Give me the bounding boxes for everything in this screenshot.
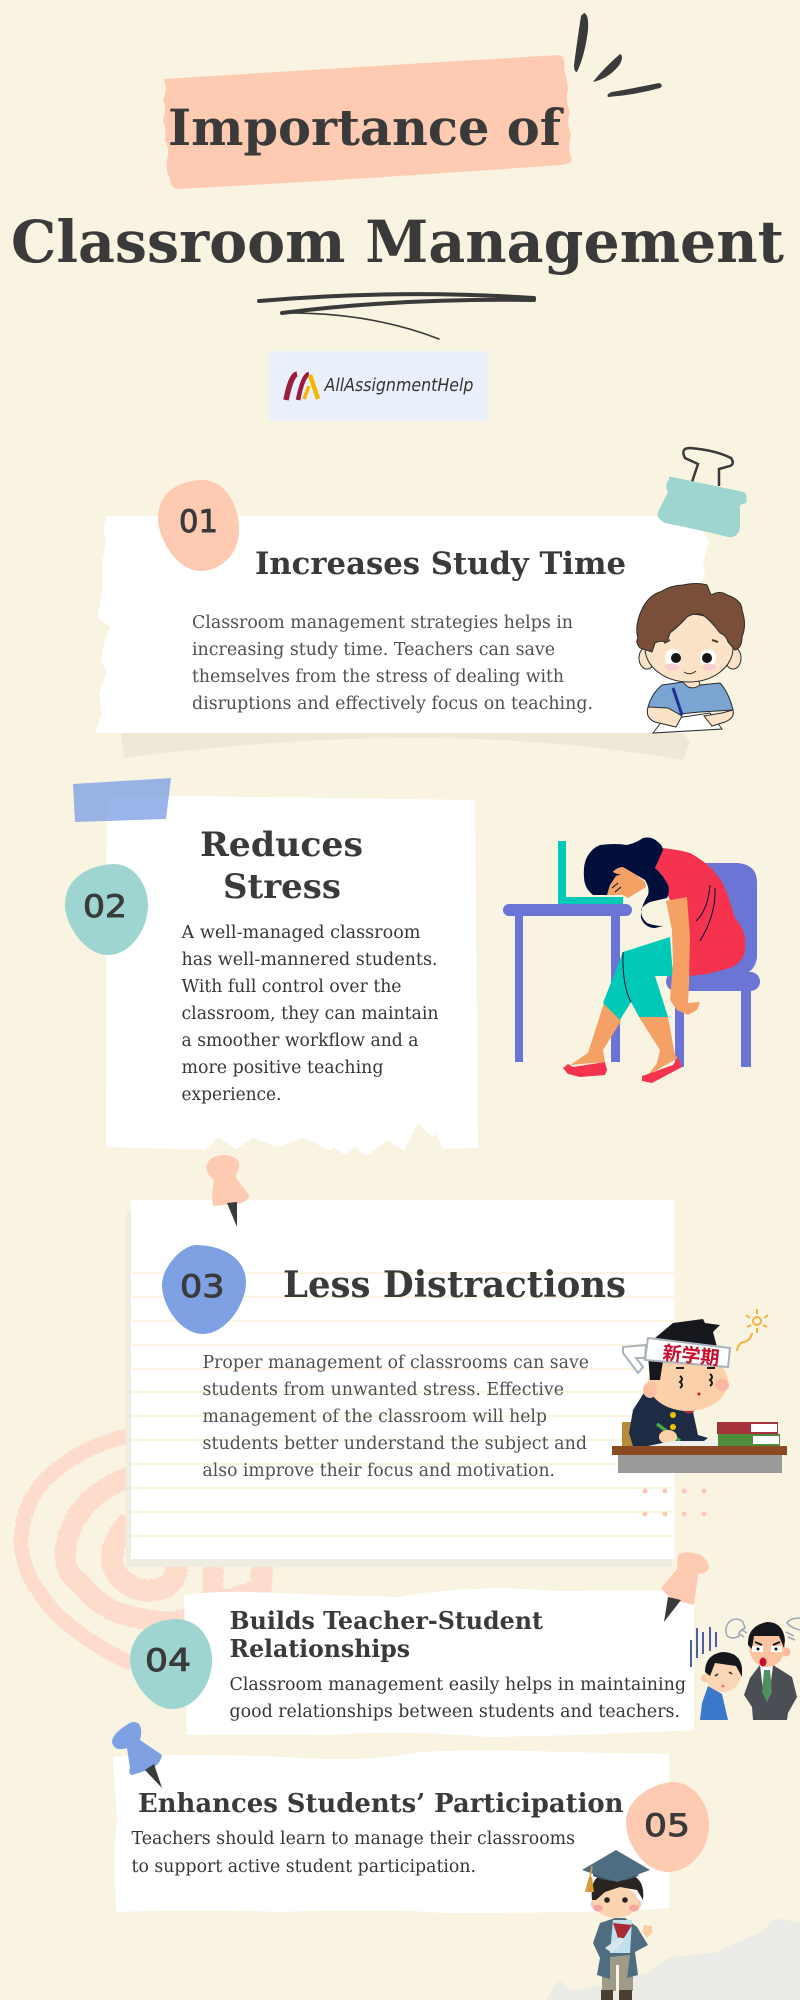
body text 04: good relationships between students and teachers. [230,1702,680,1722]
body text 04 [230,1675,686,1722]
torn grey paper, bottom right [546,1918,800,2000]
laptop [558,841,623,904]
number badge 02: 02 [83,889,127,925]
illustration: boy writing [637,584,744,733]
shirt [655,848,745,976]
heading 02: Stress [223,867,341,907]
body text 02: With full control over the [182,977,402,997]
logo: AllAssignmentHelp [324,376,474,396]
body text 04: Classroom management easily helps in maintaining [230,1675,686,1695]
shoes [563,1062,607,1077]
body text 02: experience. [182,1085,282,1105]
title: Classroom Management [11,208,784,276]
heading 02 [200,825,363,907]
body text 03: Proper management of classrooms can save [202,1353,589,1373]
headband with kanji [645,1338,730,1370]
body text 03: also improve their focus and motivation. [202,1461,555,1481]
illustration: graduate student [582,1850,652,2000]
panel: 05 Enhances Students' Participation [113,1750,669,1913]
number badge 03: 03 [180,1269,224,1305]
panel: 03 Less Distractions [126,1200,706,1567]
chair [666,863,760,1067]
icon: binder clip [658,448,747,537]
body text 02: more positive teaching [182,1058,384,1078]
body text 01: disruptions and effectively focus on teaching. [192,694,593,714]
body text 05: Teachers should learn to manage their classrooms [132,1829,575,1849]
body text 03: students better understand the subject and [202,1434,587,1454]
title underline scribble [259,294,534,339]
heading 04 [230,1606,544,1663]
background swirl [21,1435,263,1664]
sparkle [737,1309,768,1351]
body text 05: to support active student participation. [132,1857,476,1877]
number badge 01 [158,480,239,571]
panel: 02 Reduces Stress [65,778,478,1156]
illustration: student with headband [612,1309,787,1473]
trousers [603,937,673,1020]
title [11,98,784,276]
illustration: angry teacher and sad student [691,1618,800,1720]
body text 03: students from unwanted stress. Effective [202,1380,564,1400]
icon: peach pin on panel 04 [661,1552,709,1622]
headband with kanji: 新学期 [661,1341,721,1370]
title highlight strip [163,55,572,189]
arm [666,897,700,1015]
number badge 04 [130,1619,212,1709]
heading 03: Less Distractions [283,1264,626,1306]
number badge 05 [626,1782,709,1872]
number badge 04: 04 [145,1643,191,1679]
body text 03 [202,1353,589,1481]
icon: accent strokes [574,13,662,97]
body text 01: themselves from the stress of dealing with [192,667,564,687]
body text 01: increasing study time. Teachers can save [192,640,555,660]
body text 02: has well-mannered students. [182,950,438,970]
body text 02 [180,923,438,1105]
heading 04: Builds Teacher-Student [230,1606,544,1635]
number badge 01: 01 [179,504,218,540]
panel: 01 Increases Study Time [95,480,709,760]
body text 01 [192,613,593,714]
icon: blue pin [112,1722,162,1788]
legs [570,1003,621,1065]
decorative dots [642,1488,706,1516]
icon: peach pin on panel 03 [206,1155,249,1227]
body text 05 [132,1829,575,1877]
heading 04: Relationships [230,1634,410,1663]
heading 01: Increases Study Time [255,546,626,582]
panel: 04 Builds Teacher-Student Relationships [130,1588,694,1737]
heading 02: Reduces [200,825,363,865]
title: Importance of [168,98,564,157]
hair [584,838,669,928]
body text 01: Classroom management strategies helps in [192,613,573,633]
face [607,866,646,898]
logo [269,351,487,421]
number badge 05: 05 [644,1808,690,1844]
illustration: tired woman at desk [503,838,760,1083]
man [744,1665,797,1720]
body text 02: a smoother workflow and a [182,1031,418,1051]
number badge 02 [65,864,148,955]
body text 02: classroom, they can maintain [182,1004,438,1024]
body text 02: A well-managed classroom [180,923,421,943]
body text 03: management of the classroom will help [202,1407,547,1427]
desk [503,904,632,1062]
heading 05: Enhances Students’ Participation [138,1789,624,1819]
boy [700,1686,728,1720]
tape [73,778,171,822]
number badge 03 [162,1245,246,1334]
